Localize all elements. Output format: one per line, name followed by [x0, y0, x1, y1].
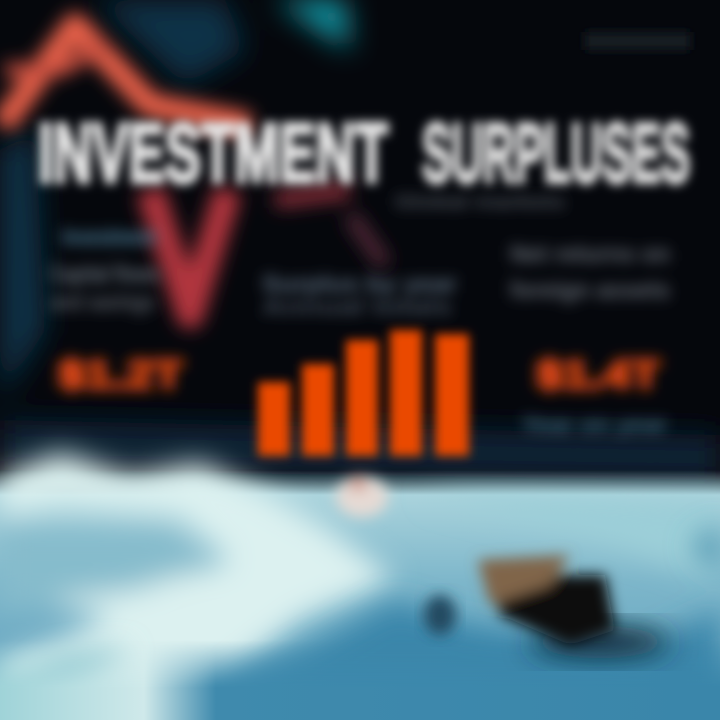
background glow: teal upper shapes — [0, 0, 720, 480]
left column text: Capital flows — [50, 261, 160, 288]
rock body — [478, 555, 615, 645]
rock small piece — [424, 595, 456, 635]
panel: right column — [395, 192, 670, 437]
right column text: foreign assets — [510, 277, 670, 304]
centre column text — [262, 271, 457, 319]
bright ice ridges — [0, 452, 720, 720]
title: INVESTMENT — [38, 106, 388, 200]
centre column text: Surplus by year — [262, 271, 457, 298]
centre column text: Annual totals — [262, 297, 452, 319]
bar chart — [258, 330, 469, 456]
panel: centre column — [258, 271, 469, 456]
icon: red zigzag line — [2, 25, 385, 315]
right figure: $1.4T — [536, 353, 660, 397]
left figure: $1.2T — [58, 353, 183, 397]
rock shadow — [530, 626, 670, 658]
left column text: Investment — [62, 224, 157, 251]
icon: small peach marker on ice — [336, 476, 388, 517]
right column text: Global markets — [395, 192, 565, 212]
icy landscape — [0, 452, 720, 720]
water floor at frame edge — [0, 640, 720, 720]
ice base — [0, 470, 720, 720]
right note: Year on year — [522, 412, 667, 437]
left column text — [50, 224, 160, 316]
right column text — [395, 192, 670, 304]
right column text: Net returns on — [510, 241, 670, 268]
icon: dark rock — [424, 555, 670, 658]
panel: left column — [50, 224, 183, 397]
deep water — [0, 525, 720, 720]
top-right label — [585, 32, 690, 50]
left column text: and savings — [50, 289, 155, 316]
